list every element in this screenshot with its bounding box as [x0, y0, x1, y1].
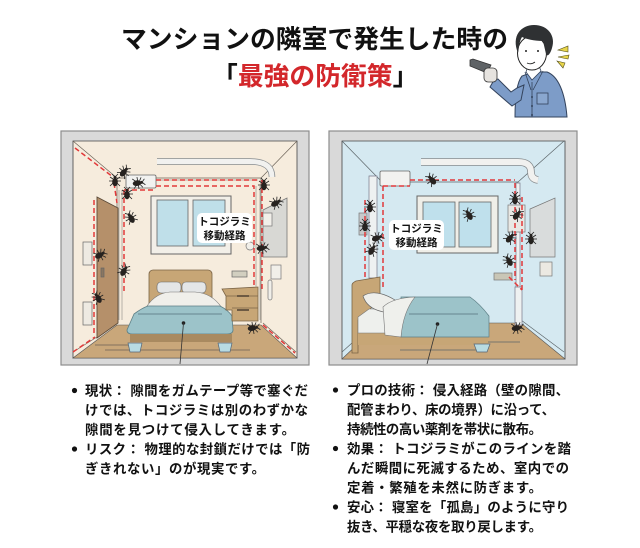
left room red route — [73, 148, 295, 353]
left room label — [197, 213, 252, 243]
left room bugs — [89, 163, 285, 335]
left room corner lines — [73, 141, 297, 352]
left room outlets — [83, 242, 247, 325]
left room pointer — [180, 321, 185, 364]
right room bugs — [359, 171, 537, 335]
right room pointer — [427, 322, 439, 364]
right room walls — [342, 141, 565, 359]
text block: right bullets: 抜き、平穏な夜を取り戻します。 — [347, 518, 542, 534]
right room red route — [365, 180, 522, 290]
left room wall gadgets — [246, 213, 281, 300]
right room duct — [421, 162, 538, 180]
right room corner lines — [342, 141, 564, 352]
text block: left bullets: リスク： 物理的な封鎖だけでは「防 — [85, 441, 310, 457]
text block: right bullets: 配管まわり、床の境界）に沿って、 — [347, 402, 555, 418]
right room wall panels — [359, 198, 555, 280]
right room label — [389, 220, 444, 250]
text block: right bullets — [333, 382, 572, 534]
text block: left bullets — [72, 382, 310, 476]
right room window — [417, 196, 498, 253]
text block: left bullets: ぎきれない」のが現実です。 — [85, 460, 265, 476]
title — [121, 25, 508, 91]
text block: left bullets: 隙間を見つけて侵入してきます。 — [85, 422, 295, 438]
right room label: 移動経路 — [396, 236, 438, 249]
text block: right bullets: んだ瞬間に死滅するため、室内での — [347, 460, 569, 476]
text block: right bullets: 定着・繁殖を未然に防ぎます。 — [347, 480, 542, 496]
text block: left bullets: けでは、トコジラミは別のわずかな — [85, 402, 308, 418]
right room bed — [352, 277, 490, 353]
left room label: トコジラミ — [198, 216, 251, 228]
left room nightstand — [222, 287, 258, 321]
left room window — [151, 196, 231, 254]
right room floor — [342, 323, 565, 359]
text block: left bullets: 現状： 隙間をガムテープ等で塞ぐだ — [85, 382, 308, 398]
left room floor — [73, 325, 297, 358]
left room duct — [157, 162, 272, 177]
left room air conditioner — [126, 175, 156, 188]
right room air conditioner — [380, 171, 410, 186]
right room label: トコジラミ — [390, 223, 443, 235]
panel: right room — [329, 131, 577, 365]
panel: left room — [61, 131, 309, 365]
left room bed — [127, 270, 233, 352]
right room vertical pipes — [369, 176, 522, 325]
text block: right bullets: プロの技術： 侵入経路（壁の隙間、 — [347, 382, 569, 398]
text block: right bullets: 持続性の高い薬剤を帯状に散布。 — [347, 421, 542, 437]
title: マンションの隣室で発生した時の — [121, 25, 508, 54]
left room wall conduits — [119, 180, 260, 320]
icon: man with flashlight — [470, 25, 569, 117]
left room wall panel — [263, 198, 287, 257]
title: 「最強の防衛策」 — [212, 62, 418, 91]
left room walls — [73, 141, 297, 358]
text block: right bullets: 効果： トコジラミがこのラインを踏 — [347, 440, 572, 456]
text block: right bullets: 安心： 寝室を「孤島」のように守り — [347, 499, 569, 515]
left room door — [97, 197, 118, 338]
left room label: 移動経路 — [204, 229, 246, 242]
